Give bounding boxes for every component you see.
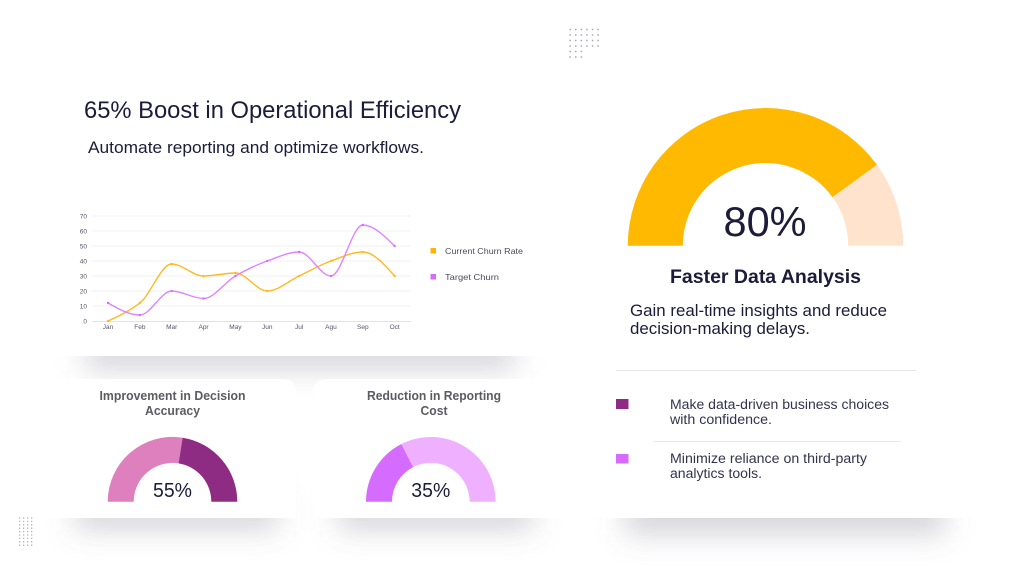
main gauge 80%: 80% [724, 198, 806, 245]
series: target churn [107, 224, 396, 316]
panel: improvement in decision accuracy [40, 379, 296, 518]
heading: 65% Boost in Operational Efficiency [84, 97, 461, 124]
y axis labels: 50 [80, 244, 87, 250]
x axis labels: Agu [325, 324, 337, 331]
x axis labels [103, 324, 400, 331]
subheading: Automate reporting and optimize workflows. [88, 138, 424, 157]
y axis labels: 10 [80, 304, 87, 310]
gauge 35%: 35% [411, 480, 451, 502]
y axis labels: 20 [80, 288, 87, 296]
card title: Cost [420, 403, 448, 418]
gauge 55%: 55% [153, 480, 192, 502]
panel: reduction in reporting cost [313, 379, 570, 518]
y axis labels: 70 [80, 214, 87, 220]
list item: third-party reliance [616, 451, 867, 481]
x axis labels: Sep [357, 324, 369, 331]
y axis labels: 0 [83, 318, 87, 326]
list item: data-driven choices: with confidence. [669, 412, 772, 427]
list item: third-party reliance: analytics tools. [670, 466, 762, 481]
card title: Reduction in Reporting [367, 388, 501, 403]
decorative dot grid: bottom left [19, 518, 33, 545]
x axis labels: Oct [390, 324, 400, 331]
x axis labels: Feb [134, 324, 146, 331]
gauge description [630, 302, 887, 338]
x axis labels: Apr [198, 324, 209, 331]
panel: chart background [0, 190, 570, 356]
list item: data-driven choices: Make data-driven business choices [670, 397, 889, 412]
gauge description: Gain real-time insights and reduce [630, 302, 887, 320]
main gauge 80% [628, 108, 903, 246]
list item: data-driven choices [616, 397, 889, 427]
gauge 55% [108, 437, 237, 502]
gauge description: decision-making delays. [630, 320, 810, 338]
y axis labels: 40 [80, 258, 87, 266]
card title: Improvement in Decision [100, 388, 246, 403]
panel: right background [590, 70, 990, 518]
chart legend [430, 246, 523, 282]
list item: third-party reliance: Minimize reliance on third-party [670, 451, 867, 466]
panel shadows [75, 338, 945, 535]
gauge 35% [366, 437, 496, 502]
card title [100, 388, 246, 418]
line chart [80, 214, 411, 331]
y axis labels: 30 [80, 274, 87, 280]
series: current churn rate [107, 251, 396, 322]
x axis labels: Jul [295, 324, 304, 331]
x axis labels: Mar [166, 324, 178, 331]
x axis labels: Jan [103, 324, 114, 331]
card title: Accuracy [145, 403, 201, 418]
chart legend: Current Churn Rate [445, 246, 523, 256]
x axis labels: May [229, 324, 242, 331]
chart legend: Target Churn [445, 272, 499, 282]
decorative dot grid: top [569, 30, 599, 57]
card title [367, 388, 501, 418]
gauge title: Faster Data Analysis [670, 267, 861, 288]
y axis labels [80, 214, 87, 326]
x axis labels: Jun [262, 324, 273, 331]
y axis labels: 60 [80, 228, 87, 236]
